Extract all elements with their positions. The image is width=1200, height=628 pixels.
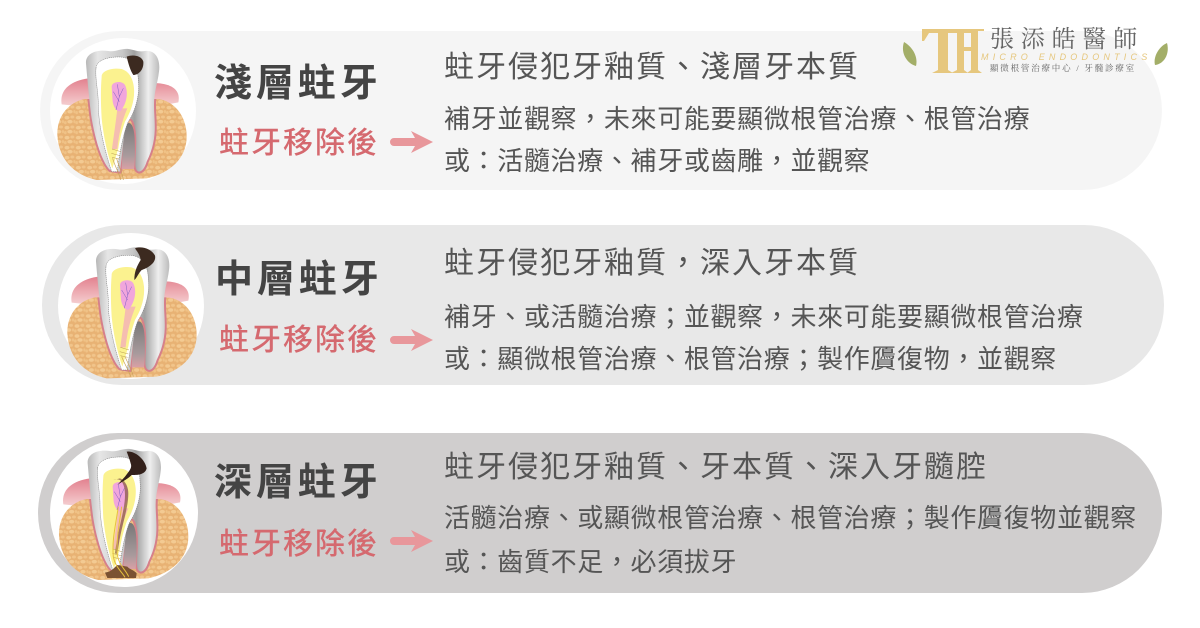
title: shallow: 淺層蛀牙 bbox=[214, 63, 382, 105]
label: after removal: 蛀牙移除後 bbox=[219, 324, 379, 357]
tooth illustration: middle bbox=[58, 233, 204, 379]
title: middle: 中層蛀牙 bbox=[215, 259, 383, 301]
treatment text: shallow: 或：活髓治療、補牙或齒雕，並觀察 bbox=[444, 146, 870, 176]
label: after removal: 蛀牙移除後 bbox=[219, 528, 379, 561]
logo monogram bbox=[922, 29, 984, 73]
heading: deep description: 蛀牙侵犯牙釉質、牙本質、深入牙髓腔 bbox=[444, 451, 988, 484]
treatment text: shallow: 補牙並觀察，未來可能要顯微根管治療、根管治療 bbox=[444, 104, 1030, 134]
label: after removal: 蛀牙移除後 bbox=[219, 127, 379, 160]
treatment text: middle: 或：顯微根管治療、根管治療；製作贗復物，並觀察 bbox=[444, 344, 1057, 374]
panel: shallow caries bbox=[40, 31, 1162, 190]
treatment text: deep: 或：齒質不足，必須拔牙 bbox=[444, 547, 737, 577]
doctor name: 張添皓醫師 bbox=[990, 26, 1144, 53]
logo bbox=[903, 26, 1168, 73]
subtitle: 顯微根管治療中心 / 牙髓診療室 bbox=[990, 63, 1136, 73]
title: deep: 深層蛀牙 bbox=[214, 462, 382, 504]
tooth illustration: shallow bbox=[50, 38, 196, 184]
arrow bbox=[390, 329, 433, 351]
panel: deep caries bbox=[38, 433, 1162, 593]
icon: right leaf bbox=[1155, 43, 1168, 65]
arrow bbox=[390, 131, 433, 153]
treatment text: deep: 活髓治療、或顯微根管治療、根管治療；製作贗復物並觀察 bbox=[444, 503, 1137, 533]
english tagline: MICRO ENDODONTICS bbox=[981, 52, 1151, 62]
tooth illustration: deep bbox=[50, 439, 198, 587]
panel: middle caries bbox=[42, 225, 1164, 385]
heading: middle description: 蛀牙侵犯牙釉質，深入牙本質 bbox=[444, 247, 860, 280]
heading: shallow description: 蛀牙侵犯牙釉質、淺層牙本質 bbox=[444, 51, 860, 84]
icon: left leaf bbox=[903, 42, 916, 66]
arrow bbox=[390, 530, 433, 552]
treatment text: deep bbox=[444, 503, 1137, 577]
treatment text: middle bbox=[444, 302, 1084, 374]
treatment text: shallow bbox=[444, 104, 1030, 176]
treatment text: middle: 補牙、或活髓治療；並觀察，未來可能要顯微根管治療 bbox=[444, 302, 1084, 332]
